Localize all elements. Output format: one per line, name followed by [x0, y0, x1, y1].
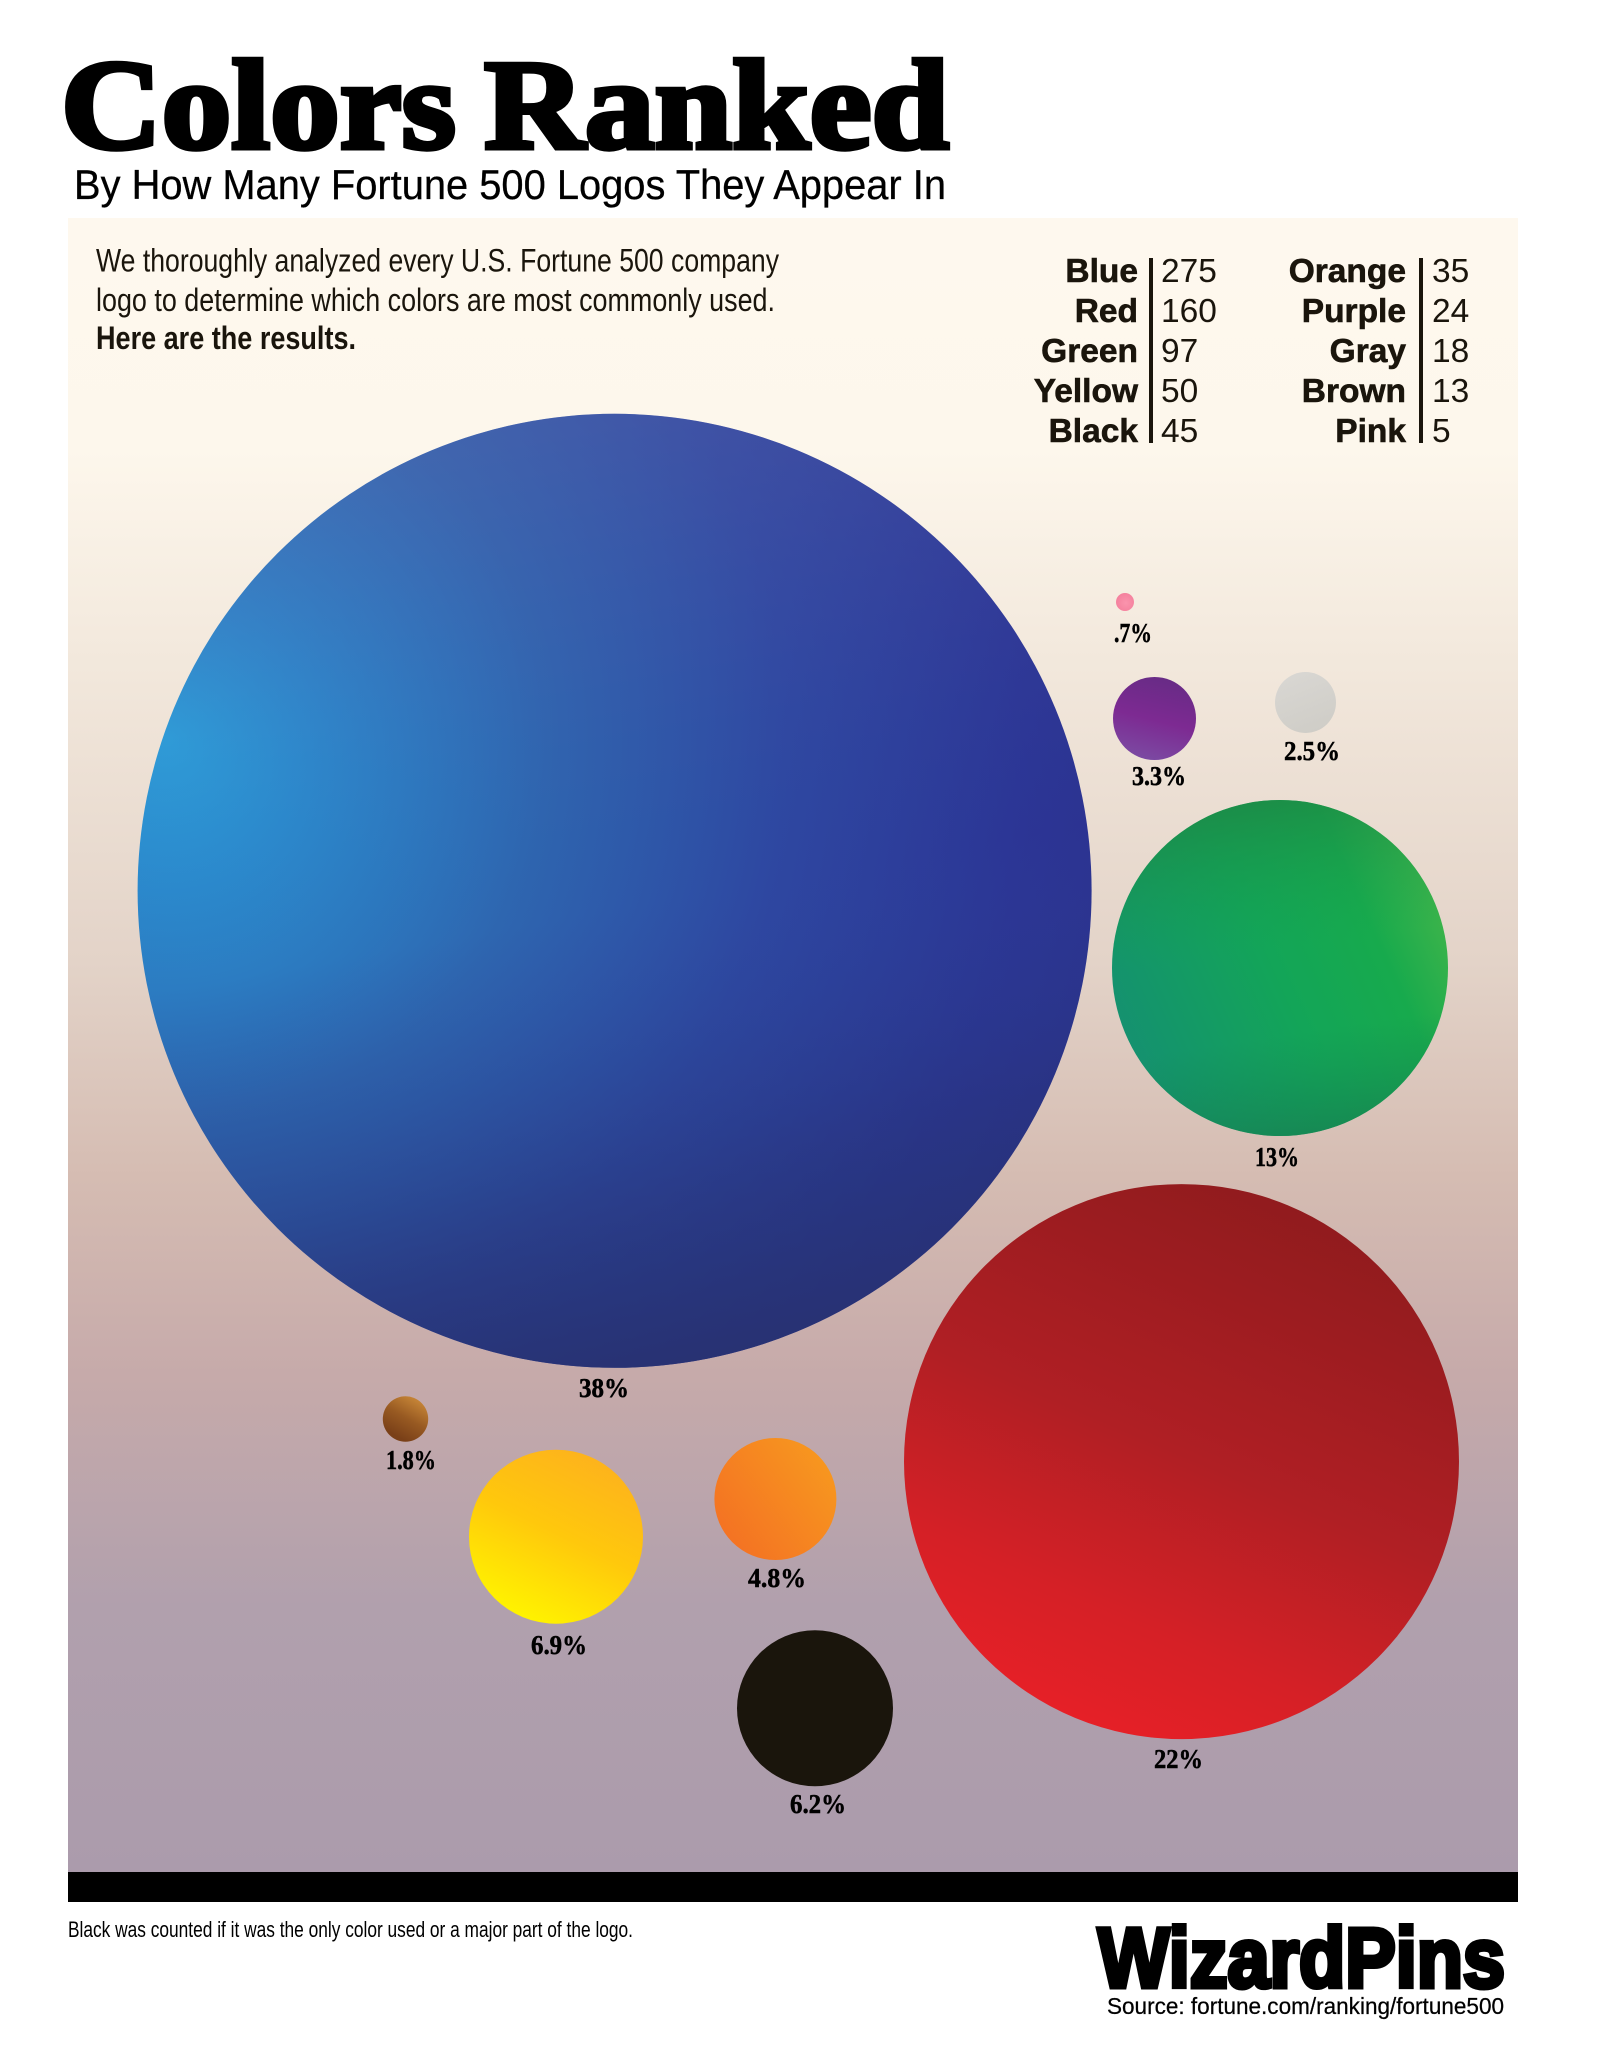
bubble: purple 3.3%: 3.3% [1132, 761, 1186, 791]
bubble: orange 4.8%: 4.8% [748, 1563, 806, 1593]
bubble: pink .7% [1114, 593, 1152, 648]
intro text block: We thoroughly analyzed every U.S. Fortune 500 company [96, 242, 779, 278]
legend table: counts by color, column two [1289, 253, 1469, 450]
source line: Source: fortune.com/ranking/fortune500 [1107, 1993, 1504, 2019]
legend table: counts by color, column two: Pink [1335, 413, 1406, 450]
legend table: counts by color, column two: 5 [1432, 413, 1451, 450]
bubble: green 13%: 13% [1255, 1142, 1299, 1172]
bubble: gray 2.5%: 2.5% [1284, 736, 1340, 766]
panel: gradient background [68, 218, 1518, 1872]
legend table: counts by color, column one: Red [1075, 293, 1138, 330]
bubble: brown 1.8% [383, 1396, 436, 1475]
bubble: green 13% [1112, 800, 1448, 1172]
bubble: brown 1.8%: 1.8% [386, 1445, 436, 1475]
black footer bar [68, 1872, 1518, 1902]
legend table: counts by color, column one: Blue [1065, 253, 1138, 290]
bubble: gray 2.5% [1275, 672, 1340, 766]
bubble: yellow 6.9% [469, 1450, 643, 1660]
legend table: counts by color, column one: 97 [1161, 333, 1198, 370]
intro text block: Here are the results. [96, 320, 356, 356]
bubble: purple 3.3% [1113, 677, 1196, 791]
footnote: Black was counted if it was the only color used or a major part of the logo. [68, 1917, 633, 1942]
legend table: counts by color, column two: 35 [1432, 253, 1469, 290]
legend table: counts by color, column one: 45 [1161, 413, 1198, 450]
bubble: red 22%: 22% [1154, 1744, 1203, 1774]
bubble: pink .7%: .7% [1114, 618, 1152, 648]
legend table: counts by color, column two: Gray [1330, 333, 1406, 370]
bubble: orange 4.8% [714, 1438, 836, 1593]
bubble: blue 38% [138, 414, 1092, 1403]
legend table: counts by color, column one: 50 [1161, 373, 1198, 410]
legend table: counts by color, column two: Orange [1289, 253, 1406, 290]
legend table: counts by color, column one: Yellow [1034, 373, 1139, 410]
title: Colors Ranked [61, 34, 949, 176]
bubble: yellow 6.9%: 6.9% [531, 1630, 587, 1660]
legend table: counts by color, column two: 13 [1432, 373, 1469, 410]
logo: WizardPins wordmark: WizardPins [1098, 1911, 1505, 2005]
legend table: counts by color, column two: 24 [1432, 293, 1469, 330]
bubble: black 6.2% [737, 1630, 893, 1819]
legend table: counts by color, column two: Purple [1302, 293, 1406, 330]
legend table: counts by color, column two: Brown [1302, 373, 1406, 410]
legend table: counts by color, column one: Black [1049, 413, 1138, 450]
legend table: counts by color, column one: Green [1041, 333, 1138, 370]
bubble: blue 38%: 38% [579, 1373, 629, 1403]
intro text block [96, 242, 779, 356]
legend table: counts by color, column two: 18 [1432, 333, 1469, 370]
legend table: counts by color, column one: 275 [1161, 253, 1217, 290]
subtitle: By How Many Fortune 500 Logos They Appear In [74, 161, 946, 208]
bubble: red 22% [904, 1184, 1459, 1774]
intro text block: logo to determine which colors are most commonly used. [96, 282, 775, 318]
bubble: black 6.2%: 6.2% [790, 1789, 846, 1819]
legend table: counts by color, column one: 160 [1161, 293, 1217, 330]
legend table: counts by color, column one [1034, 253, 1217, 450]
